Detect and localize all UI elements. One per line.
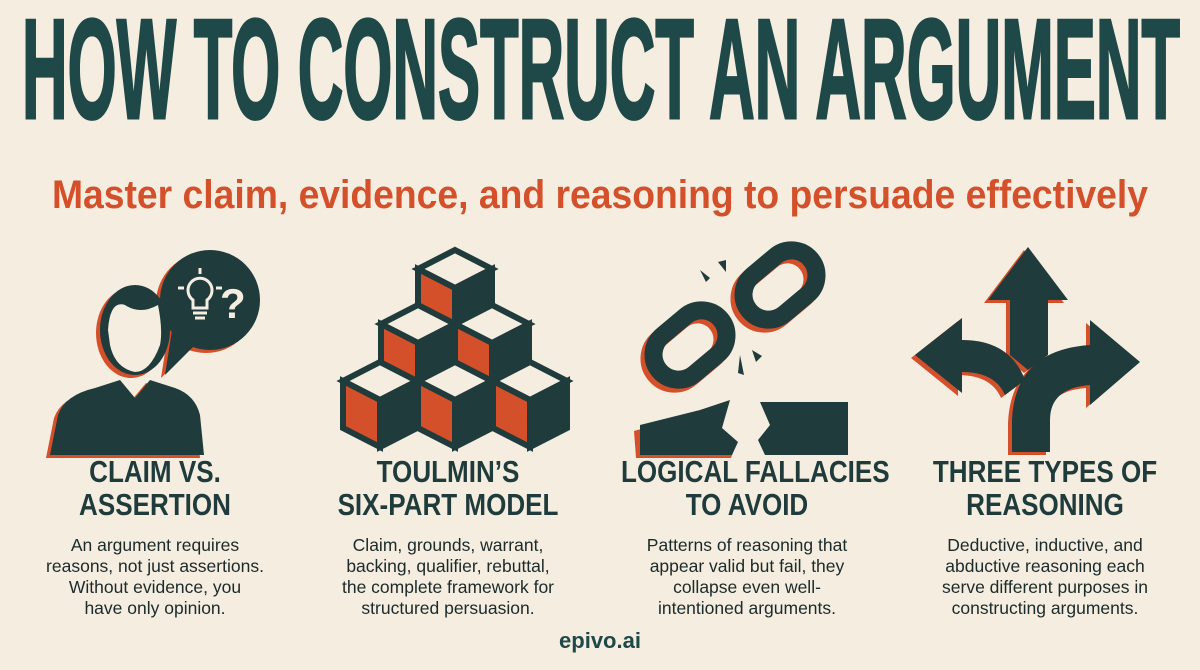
heading: fallacies: TO AVOID [686, 487, 808, 522]
panel: logical fallacies [621, 454, 890, 618]
text: claim body [46, 535, 264, 618]
panel: claim vs assertion [46, 454, 264, 618]
text: reasoning body: serve different purposes in [942, 577, 1148, 597]
heading: reasoning: REASONING [966, 487, 1124, 522]
text: toulmin body: Claim, grounds, warrant, [353, 535, 543, 555]
heading: claim vs assertion [79, 454, 231, 522]
heading: toulmin: SIX-PART MODEL [338, 487, 558, 522]
text: toulmin body: the complete framework for [342, 577, 554, 597]
panel: toulmin model [338, 454, 558, 618]
icon: person with speech bubble: ? [220, 280, 246, 327]
text: toulmin body: structured persuasion. [361, 598, 535, 618]
heading: fallacies: LOGICAL FALLACIES [621, 454, 890, 489]
text: reasoning body: constructing arguments. [952, 598, 1138, 618]
heading: fallacies [621, 454, 890, 522]
text: fallacies body: appear valid but fail, they [650, 556, 844, 576]
text: claim body: An argument requires [71, 535, 239, 555]
icon: person with speech bubble [46, 250, 260, 458]
icon: broken chain [634, 240, 848, 458]
text: reasoning body [942, 535, 1148, 618]
footer: epivo.ai [559, 628, 641, 653]
text: fallacies body: intentioned arguments. [658, 598, 836, 618]
text: fallacies body: Patterns of reasoning that [647, 535, 847, 555]
text: claim body: Without evidence, you [69, 577, 241, 597]
text: claim body: reasons, not just assertions. [46, 556, 264, 576]
title [22, 0, 1180, 217]
icon: stacked cubes [343, 250, 567, 447]
text: toulmin body [342, 535, 554, 618]
text: fallacies body: collapse even well- [673, 577, 821, 597]
heading: toulmin [338, 454, 558, 522]
text: toulmin body: backing, qualifier, rebuttal, [346, 556, 550, 576]
text: reasoning body: Deductive, inductive, and [947, 535, 1143, 555]
heading: toulmin: TOULMIN’S [377, 454, 519, 489]
heading: claim vs assertion: CLAIM VS. [89, 454, 221, 489]
text: claim body: have only opinion. [84, 598, 226, 618]
icon: branching arrows [911, 247, 1140, 455]
text: fallacies body [647, 535, 848, 618]
title: Master claim, evidence, and reasoning to persuade effectively [52, 173, 1149, 217]
icons [46, 241, 1140, 458]
heading: reasoning [933, 454, 1157, 522]
heading: reasoning: THREE TYPES OF [933, 454, 1157, 489]
text: reasoning body: abductive reasoning each [945, 556, 1145, 576]
heading: claim vs assertion: ASSERTION [79, 487, 231, 522]
panel: reasoning types [933, 454, 1157, 618]
